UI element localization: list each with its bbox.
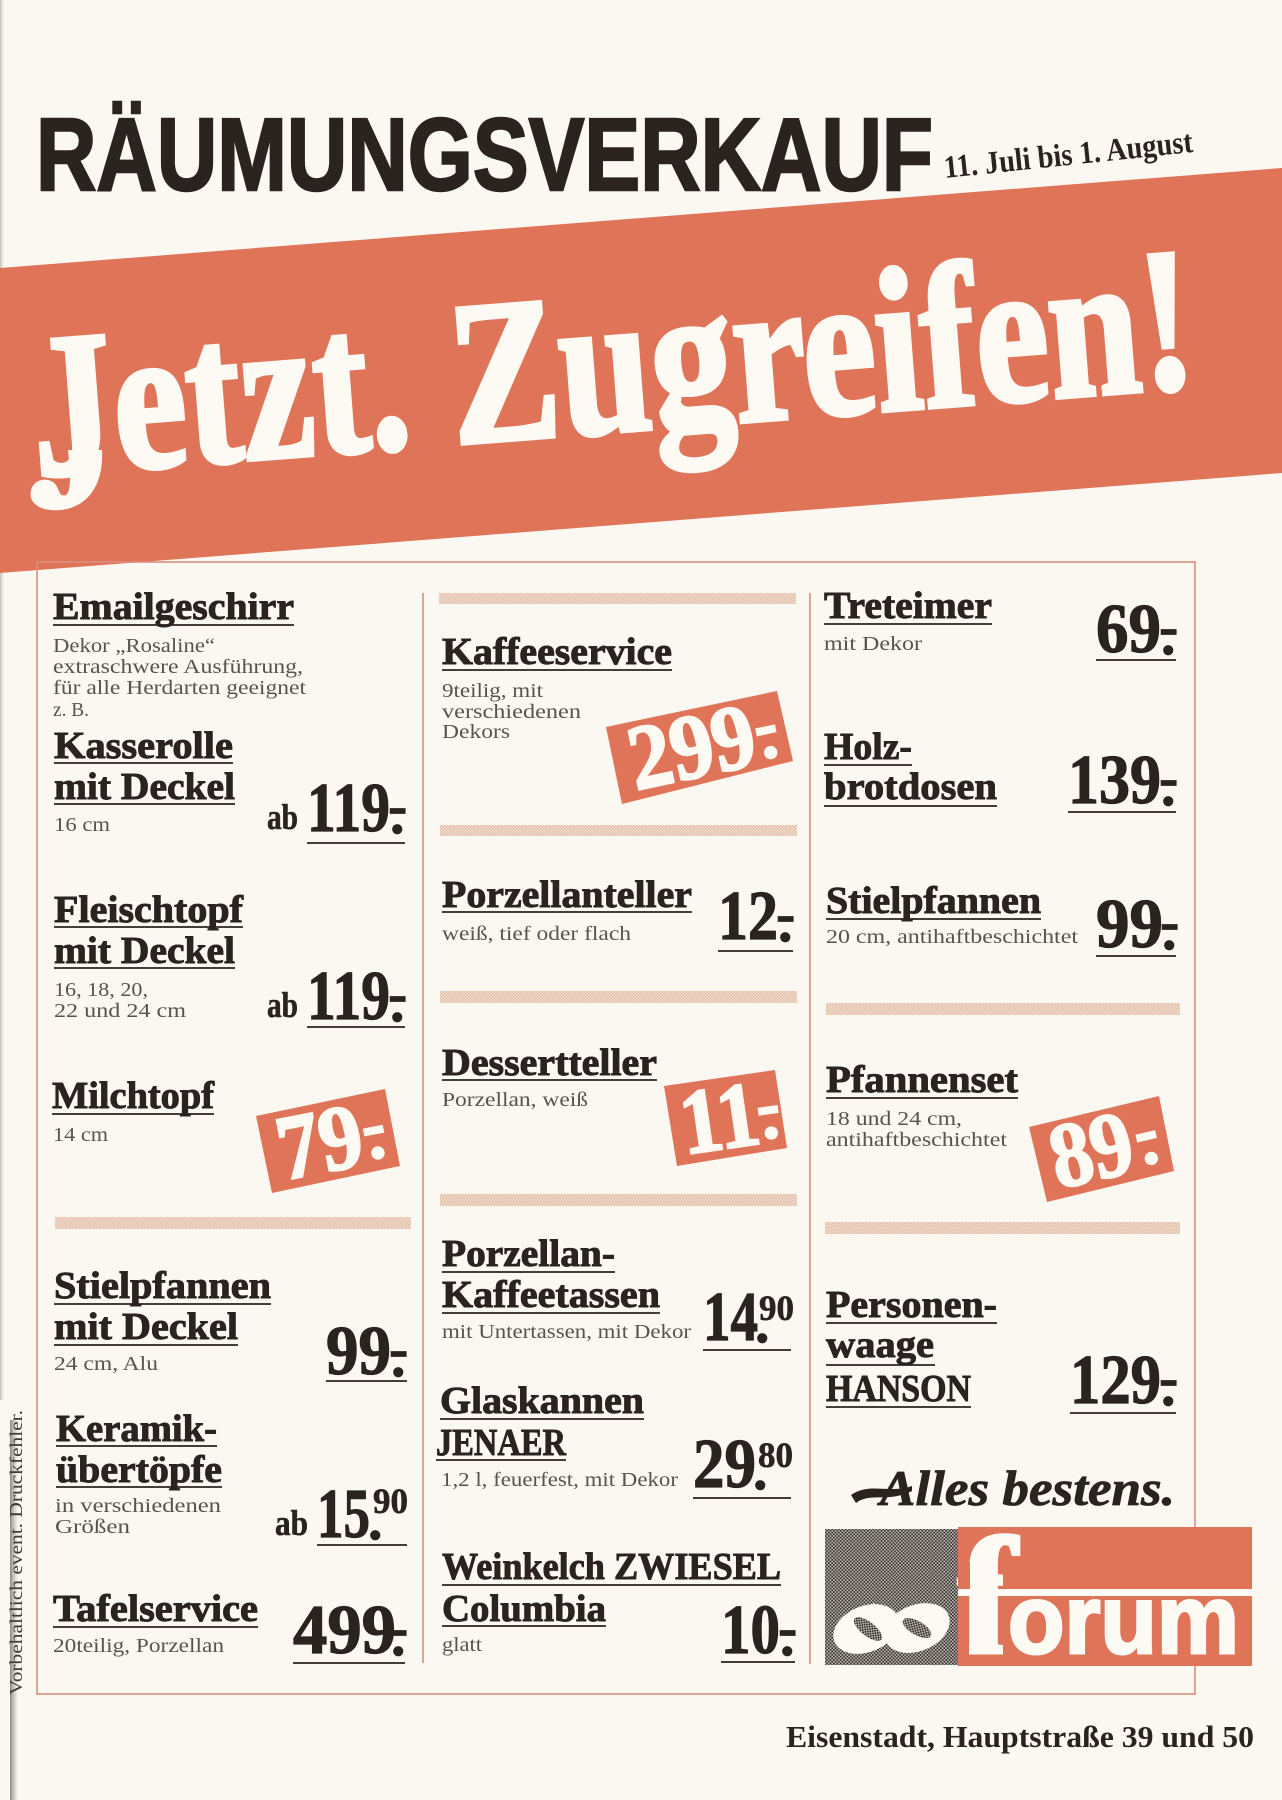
logo: checker square (825, 1529, 958, 1665)
column divider left (422, 593, 424, 1663)
price tag: 89: 89 (1040, 1091, 1142, 1208)
item: Glaskannen Jenaer: Glaskannen (440, 1380, 644, 1422)
item: Personenwaage Hanson: .- (1159, 1345, 1178, 1418)
price tag: 299: .- (745, 684, 786, 775)
item: Emailgeschirr: Dekor „Rosaline“ (53, 635, 215, 657)
banner: red slanted band (0, 168, 1282, 573)
item: Stielpfannen: Stielpfannen (826, 880, 1041, 922)
item: Treteimer: 69 (1096, 591, 1161, 668)
item: Keramikübertöpfe: übertöpfe (56, 1449, 222, 1491)
item: Holzbrotdosen: 139 (1068, 742, 1161, 819)
item: Tafelservice: 499 (293, 1592, 396, 1669)
item: Keramikübertöpfe (55, 1408, 408, 1553)
item: Stielpfannen: 20 cm, antihaftbeschichtet (826, 926, 1079, 948)
item: Holzbrotdosen: .- (1159, 745, 1178, 818)
item: Fleischtopf mit Deckel: mit Deckel (54, 930, 235, 972)
item: Stielpfannen mit Deckel: mit Deckel (54, 1306, 238, 1348)
item: Kasserolle mit Deckel: Kasserolle (54, 725, 233, 767)
item: Pfannenset (826, 1059, 1018, 1151)
item: Keramikübertöpfe: 15 (317, 1476, 370, 1553)
item: Kaffeeservice: verschiedenen (442, 701, 581, 723)
item: Glaskannen Jenaer: 29 (693, 1426, 756, 1503)
item: Keramikübertöpfe: in verschiedenen (55, 1495, 221, 1517)
item: Emailgeschirr (53, 586, 307, 721)
item: Treteimer: .- (1159, 594, 1178, 667)
item: Milchtopf: 14 cm (53, 1124, 108, 1146)
item: Glaskannen Jenaer: JENAER (436, 1422, 566, 1464)
item: Fleischtopf mit Deckel: 119 (307, 958, 390, 1035)
price tag: 79: 79 (268, 1083, 371, 1200)
item: Kasserolle mit Deckel: ab (267, 797, 298, 837)
item: Keramikübertöpfe: Größen (55, 1516, 130, 1538)
item: Pfannenset: Pfannenset (826, 1059, 1018, 1101)
item: Fleischtopf mit Deckel: 16, 18, 20, (54, 979, 148, 1001)
footer address: Eisenstadt, Hauptstraße 39 und 50 (786, 1719, 1254, 1754)
item: Weinkelch Zwiesel Columbia: Columbia (442, 1588, 606, 1630)
item: Kasserolle mit Deckel: .- (388, 773, 407, 846)
item: Personenwaage Hanson: waage (826, 1324, 934, 1366)
item: Milchtopf: Milchtopf (52, 1075, 215, 1117)
item: Holzbrotdosen: brotdosen (824, 766, 997, 808)
item: Kaffeeservice: Kaffeeservice (442, 631, 672, 673)
item: Kasserolle mit Deckel (54, 725, 407, 847)
item: Fleischtopf mit Deckel: 22 und 24 cm (54, 1000, 187, 1022)
item: Kaffeeservice (442, 631, 672, 743)
item: Personenwaage Hanson: Personen- (826, 1284, 997, 1326)
item: Fleischtopf mit Deckel (54, 889, 407, 1035)
price tag: 11: 11 (673, 1062, 766, 1174)
item: Stielpfannen: .- (1160, 889, 1179, 962)
date line: 11. Juli bis 1. August (942, 123, 1195, 185)
item: Tafelservice: Tafelservice (53, 1588, 258, 1630)
item: Porzellan-Kaffeetassen: mit Untertassen, mit Dekor (442, 1321, 691, 1343)
item: Glaskannen Jenaer: 80 (758, 1435, 793, 1475)
logo: wordmark (957, 1504, 1252, 1690)
item: Porzellan-Kaffeetassen: 90 (759, 1288, 794, 1328)
item: Kasserolle mit Deckel: mit Deckel (54, 766, 235, 808)
item: Milchtopf (52, 1075, 215, 1146)
separator bars (55, 593, 1180, 1234)
item: Weinkelch Zwiesel Columbia: .- (778, 1595, 797, 1668)
item: Tafelservice (53, 1588, 408, 1669)
price tag: 11: .- (750, 1065, 786, 1155)
logo: red field (958, 1527, 1252, 1666)
side note: printing errors: Vorbehaltlich event. Druckfehler. (6, 1410, 26, 1695)
item: Personenwaage Hanson (826, 1284, 1178, 1419)
item: Glaskannen Jenaer: . (753, 1437, 768, 1502)
item: Weinkelch Zwiesel Columbia: glatt (442, 1634, 482, 1656)
item: Weinkelch Zwiesel Columbia (442, 1546, 797, 1669)
item: Kasserolle mit Deckel: 16 cm (54, 814, 110, 836)
item: Emailgeschirr: z. B. (53, 699, 89, 721)
item: Holzbrotdosen: Holz- (824, 726, 912, 768)
item: Stielpfannen mit Deckel: 24 cm, Alu (54, 1353, 158, 1375)
item: Weinkelch Zwiesel Columbia: 10 (721, 1592, 780, 1669)
item: Treteimer: Treteimer (824, 585, 992, 627)
item: Stielpfannen mit Deckel (54, 1265, 408, 1390)
item: Stielpfannen mit Deckel: 99 (326, 1313, 391, 1390)
slogan: Alles bestens.: Alles bestens. (877, 1460, 1175, 1516)
item: Porzellanteller: .- (776, 881, 795, 954)
item: Fleischtopf mit Deckel: Fleischtopf (54, 889, 244, 931)
frame: offer panel border (37, 562, 1195, 1694)
item: Holzbrotdosen (824, 726, 1178, 819)
logo: wordmark: orum (1008, 1565, 1239, 1674)
item: Emailgeschirr: Emailgeschirr (53, 586, 294, 628)
item: Keramikübertöpfe: Keramik- (56, 1408, 217, 1450)
item: Porzellanteller: 12 (718, 878, 778, 955)
item: Personenwaage Hanson: 129 (1070, 1342, 1161, 1419)
item: Stielpfannen mit Deckel: .- (389, 1316, 408, 1389)
item: Porzellan-Kaffeetassen: Kaffeetassen (442, 1274, 660, 1316)
price tag: 89: .- (1125, 1090, 1167, 1181)
item: Kasserolle mit Deckel: 119 (307, 770, 390, 847)
item: Tafelservice: 20teilig, Porzellan (53, 1635, 224, 1657)
item: Stielpfannen mit Deckel: Stielpfannen (54, 1265, 271, 1307)
item: Porzellan-Kaffeetassen (442, 1233, 794, 1356)
price tag: 299: 299 (619, 683, 764, 810)
logo: infinity symbol (826, 1594, 957, 1663)
item: Dessertteller: Dessertteller (442, 1042, 657, 1084)
column divider right (809, 593, 811, 1664)
item: Emailgeschirr: für alle Herdarten geeignet (53, 677, 307, 699)
title: Räumungsverkauf: RÄUMUNGSVERKAUF (36, 97, 933, 212)
item: Stielpfannen (826, 880, 1179, 963)
item: Pfannenset: antihaftbeschichtet (826, 1129, 1008, 1151)
item: Tafelservice: .- (389, 1595, 408, 1668)
item: Pfannenset: 18 und 24 cm, (826, 1108, 962, 1130)
item: Porzellan-Kaffeetassen: 14 (703, 1279, 758, 1356)
item: Weinkelch Zwiesel Columbia: Weinkelch ZWIESEL (442, 1546, 781, 1588)
item: Porzellanteller: Porzellanteller (442, 874, 692, 916)
item: Porzellanteller (442, 874, 795, 955)
item: Kaffeeservice: 9teilig, mit (442, 680, 544, 702)
item: Emailgeschirr: extraschwere Ausführung, (53, 656, 303, 678)
item: Stielpfannen: 99 (1096, 886, 1163, 963)
item: Porzellan-Kaffeetassen: Porzellan- (442, 1233, 615, 1275)
logo: wordmark: f (957, 1504, 1019, 1690)
item: Treteimer (824, 585, 1178, 668)
item: Fleischtopf mit Deckel: ab (267, 985, 298, 1025)
item: Personenwaage Hanson: HANSON (826, 1368, 971, 1410)
item: Kaffeeservice: Dekors (442, 721, 510, 743)
item: Porzellan-Kaffeetassen: . (755, 1290, 770, 1355)
item: Dessertteller (442, 1042, 657, 1111)
price tag: 79: .- (354, 1085, 393, 1176)
item: Keramikübertöpfe: ab (275, 1503, 308, 1543)
item: Glaskannen Jenaer: 1,2 l, feuerfest, mit Dekor (441, 1469, 678, 1491)
logo: forum (825, 1504, 1252, 1690)
item: Glaskannen Jenaer (436, 1380, 793, 1503)
item: Keramikübertöpfe: 90 (373, 1481, 408, 1521)
item: Treteimer: mit Dekor (824, 633, 922, 655)
item: Keramikübertöpfe: . (368, 1487, 382, 1552)
item: Porzellanteller: weiß, tief oder flach (442, 923, 631, 945)
item: Fleischtopf mit Deckel: .- (388, 961, 407, 1034)
item: Dessertteller: Porzellan, weiß (442, 1089, 588, 1111)
